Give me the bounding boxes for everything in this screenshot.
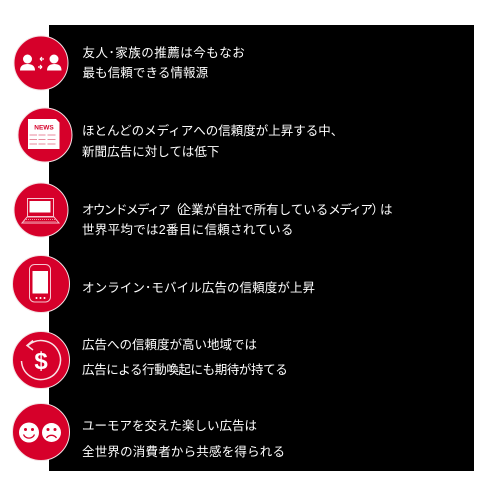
text: action (82, 338, 287, 377)
text: owned media: オウンドメディア（企業が自社で所有しているメディア）は (82, 203, 392, 217)
text: newspaper trust: ほとんどのメディアへの信頼度が上昇する中、 (82, 124, 343, 138)
text: friends and family (82, 46, 245, 80)
icon: dollar with return arrow (12, 332, 70, 388)
icon: smiling and frowning faces (12, 404, 70, 460)
icon: newspaper: NEWS (34, 124, 54, 132)
text: action: 広告への信頼度が高い地域では (82, 338, 257, 352)
icon: dollar with return arrow: $ (34, 348, 48, 375)
text: newspaper trust (82, 124, 343, 159)
text: newspaper trust: 新聞広告に対しては低下 (82, 145, 219, 159)
icon: laptop (14, 183, 68, 237)
text: humor (82, 419, 285, 459)
text: humor: ユーモアを交えた楽しい広告は (82, 419, 257, 433)
icon: two people exchanging (14, 36, 68, 90)
black background panel (49, 25, 474, 471)
icon: smartphone (12, 256, 70, 312)
text: owned media (82, 203, 392, 237)
text: friends and family: 最も信頼できる情報源 (82, 66, 208, 80)
text: owned media: 世界平均では2番目に信頼されている (82, 223, 294, 237)
text: humor: 全世界の消費者から共感を得られる (82, 445, 285, 459)
text: friends and family: 友人･家族の推薦は今もなお (82, 46, 245, 60)
text: online and mobile: オンライン･モバイル広告の信頼度が上昇 (82, 281, 315, 295)
icon: newspaper (18, 108, 72, 162)
text: action: 広告による行動喚起にも期待が持てる (82, 363, 287, 377)
